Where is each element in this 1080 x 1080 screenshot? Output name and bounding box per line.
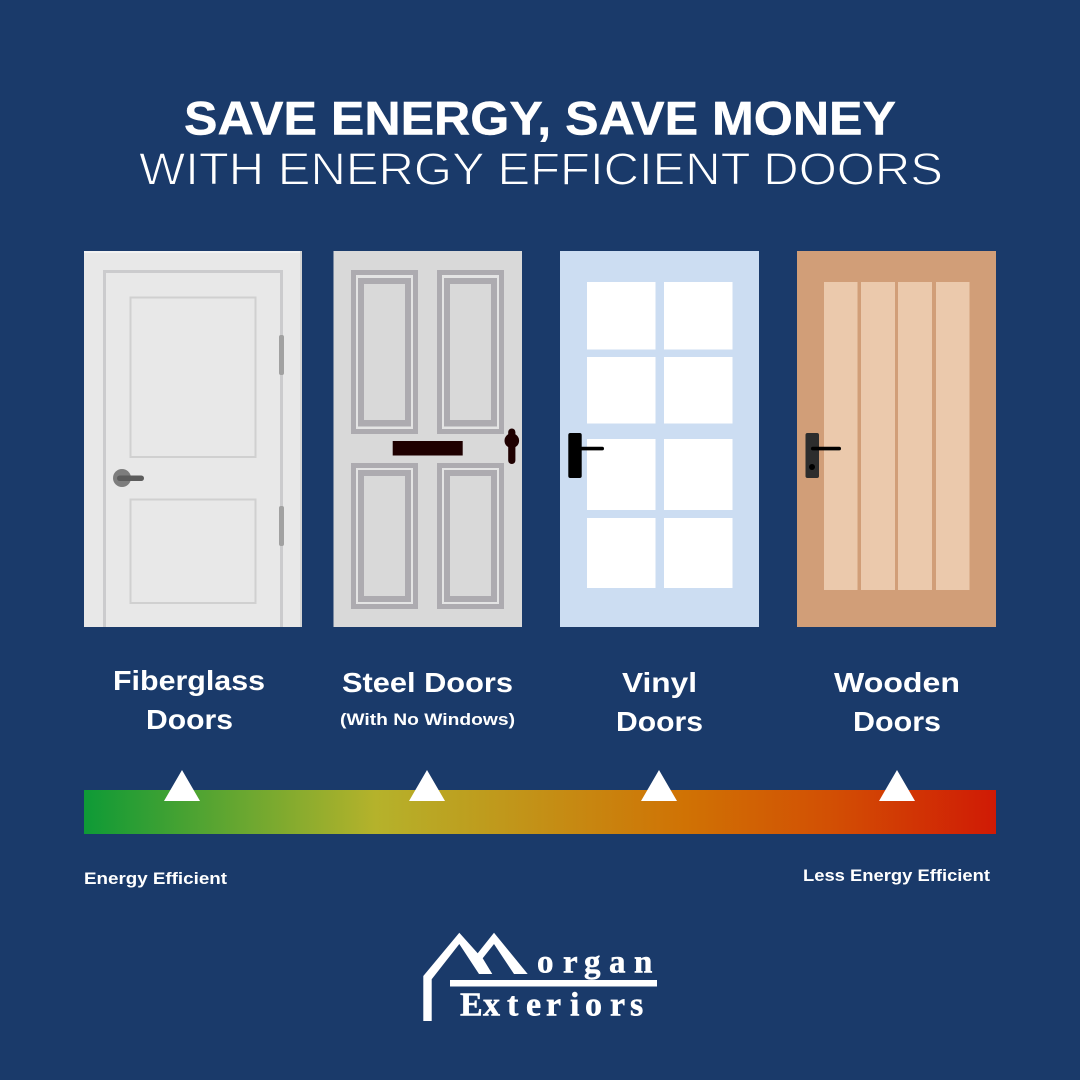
label: steel doors: Steel Doors (342, 667, 513, 698)
marker: wooden (879, 770, 915, 801)
icon: roof outline (423, 933, 528, 1021)
title line 2: WITH ENERGY EFFICIENT DOORS (139, 143, 943, 194)
panel: lower left (351, 463, 418, 609)
label: wooden doors (834, 667, 960, 737)
planks (824, 282, 970, 590)
label: wooden doors: Wooden (834, 667, 960, 698)
label: steel doors (340, 667, 515, 729)
panel: upper right (437, 270, 504, 434)
title (139, 91, 943, 194)
logo: Morgan Exteriors (423, 933, 657, 1024)
panel: upper left (351, 270, 418, 434)
icon: mail slot (393, 441, 463, 456)
scale label: energy efficient: Energy Efficient (84, 869, 227, 888)
marker: steel (409, 770, 445, 801)
label: fiberglass doors (113, 665, 265, 735)
logo divider bar (450, 980, 657, 986)
efficiency gradient bar (84, 790, 996, 834)
icon: vinyl door handle (568, 433, 604, 478)
window panes (587, 282, 732, 588)
door: vinyl (560, 251, 759, 627)
door: fiberglass (84, 251, 302, 627)
icon: door knob (504, 428, 519, 464)
label: wooden doors: Doors (853, 706, 941, 737)
icon: lower hinge (279, 506, 284, 546)
marker: fiberglass (164, 770, 200, 801)
logo word: Exteriors: Exteriors (460, 986, 643, 1024)
panel: lower right (437, 463, 504, 609)
icon: wooden door handle (806, 433, 841, 478)
label: fiberglass doors: Fiberglass (113, 665, 265, 696)
label: vinyl doors: Vinyl (622, 667, 697, 698)
door: wooden (797, 251, 996, 627)
icon: fiberglass door handle (113, 469, 144, 487)
icon: upper hinge (279, 335, 284, 375)
title line 1: SAVE ENERGY, SAVE MONEY (184, 91, 896, 144)
label: steel doors: (With No Windows) (340, 710, 515, 729)
door: steel (334, 251, 522, 627)
label: vinyl doors (616, 667, 703, 737)
label: vinyl doors: Doors (616, 706, 703, 737)
logo word: organ: organ (537, 945, 652, 981)
marker: vinyl (641, 770, 677, 801)
label: fiberglass doors: Doors (146, 704, 233, 735)
scale label: less energy efficient: Less Energy Efficient (803, 866, 990, 885)
